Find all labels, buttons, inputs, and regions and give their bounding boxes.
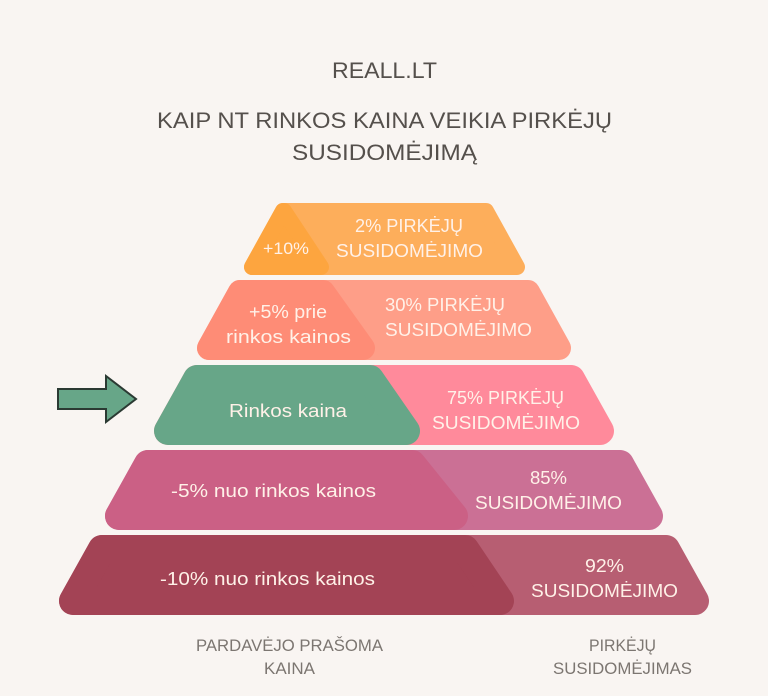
price segment: market price: [168, 379, 406, 431]
column label: buyer interest: [553, 636, 692, 678]
interest label: 75%: 75% PIRKĖJŲ: [447, 388, 564, 408]
price segment: +5%: [209, 292, 363, 348]
title: KAIP NT RINKOS KAINA VEIKIA PIRKĖJŲ: [157, 108, 612, 133]
price label: +5%: +5% prie: [249, 302, 327, 322]
interest label: 30%: 30% PIRKĖJŲ: [385, 295, 505, 315]
interest label: 30%: [385, 295, 532, 340]
pyramid tier 1: +10%: [252, 211, 517, 267]
price label: market price: Rinkos kaina: [229, 401, 348, 421]
interest label: 2%: SUSIDOMĖJIMO: [336, 241, 483, 261]
interest label: 92%: 92%: [585, 556, 624, 576]
column label: buyer interest: PIRKĖJŲ: [589, 636, 656, 655]
price label: +5%: rinkos kainos: [226, 327, 351, 347]
interest label: 30%: SUSIDOMĖJIMO: [385, 320, 532, 340]
pyramid tier 2: +5%: [209, 292, 559, 348]
interest label: 85%: SUSIDOMĖJIMO: [475, 493, 622, 513]
interest label: 75%: SUSIDOMĖJIMO: [432, 413, 580, 433]
interest label: 85%: [475, 468, 622, 513]
pyramid tier 3: market price: [168, 379, 600, 433]
interest label: 92%: [531, 556, 678, 601]
price label: -5%: -5% nuo rinkos kainos: [171, 481, 376, 501]
interest label: 2%: [336, 216, 483, 261]
pyramid tier 4: -5%: [119, 464, 649, 516]
interest label: 92%: SUSIDOMĖJIMO: [531, 581, 678, 601]
column label: buyer interest: SUSIDOMĖJIMAS: [553, 659, 692, 678]
price label: +5%: [226, 302, 351, 347]
title: SUSIDOMĖJIMĄ: [292, 140, 477, 165]
site name: REALL.LT: [332, 58, 437, 83]
interest label: 75%: [432, 388, 580, 433]
column label: seller asking price: KAINA: [264, 660, 315, 678]
column label: seller asking price: PARDAVĖJO PRAŠOMA: [196, 636, 383, 655]
price label: +10%: +10%: [263, 239, 309, 258]
title: [157, 108, 612, 165]
price segment: -10%: [73, 549, 500, 601]
interest label: 2%: 2% PIRKĖJŲ: [355, 216, 463, 236]
icon: arrow pointing to market price: [58, 376, 136, 422]
price segment: +10%: [252, 211, 321, 267]
interest label: 85%: 85%: [530, 468, 567, 488]
price segment: -5%: [119, 464, 454, 516]
price label: -10%: -10% nuo rinkos kainos: [160, 569, 375, 589]
column label: seller asking price: [196, 636, 383, 678]
pyramid tier 5: -10%: [73, 549, 695, 601]
